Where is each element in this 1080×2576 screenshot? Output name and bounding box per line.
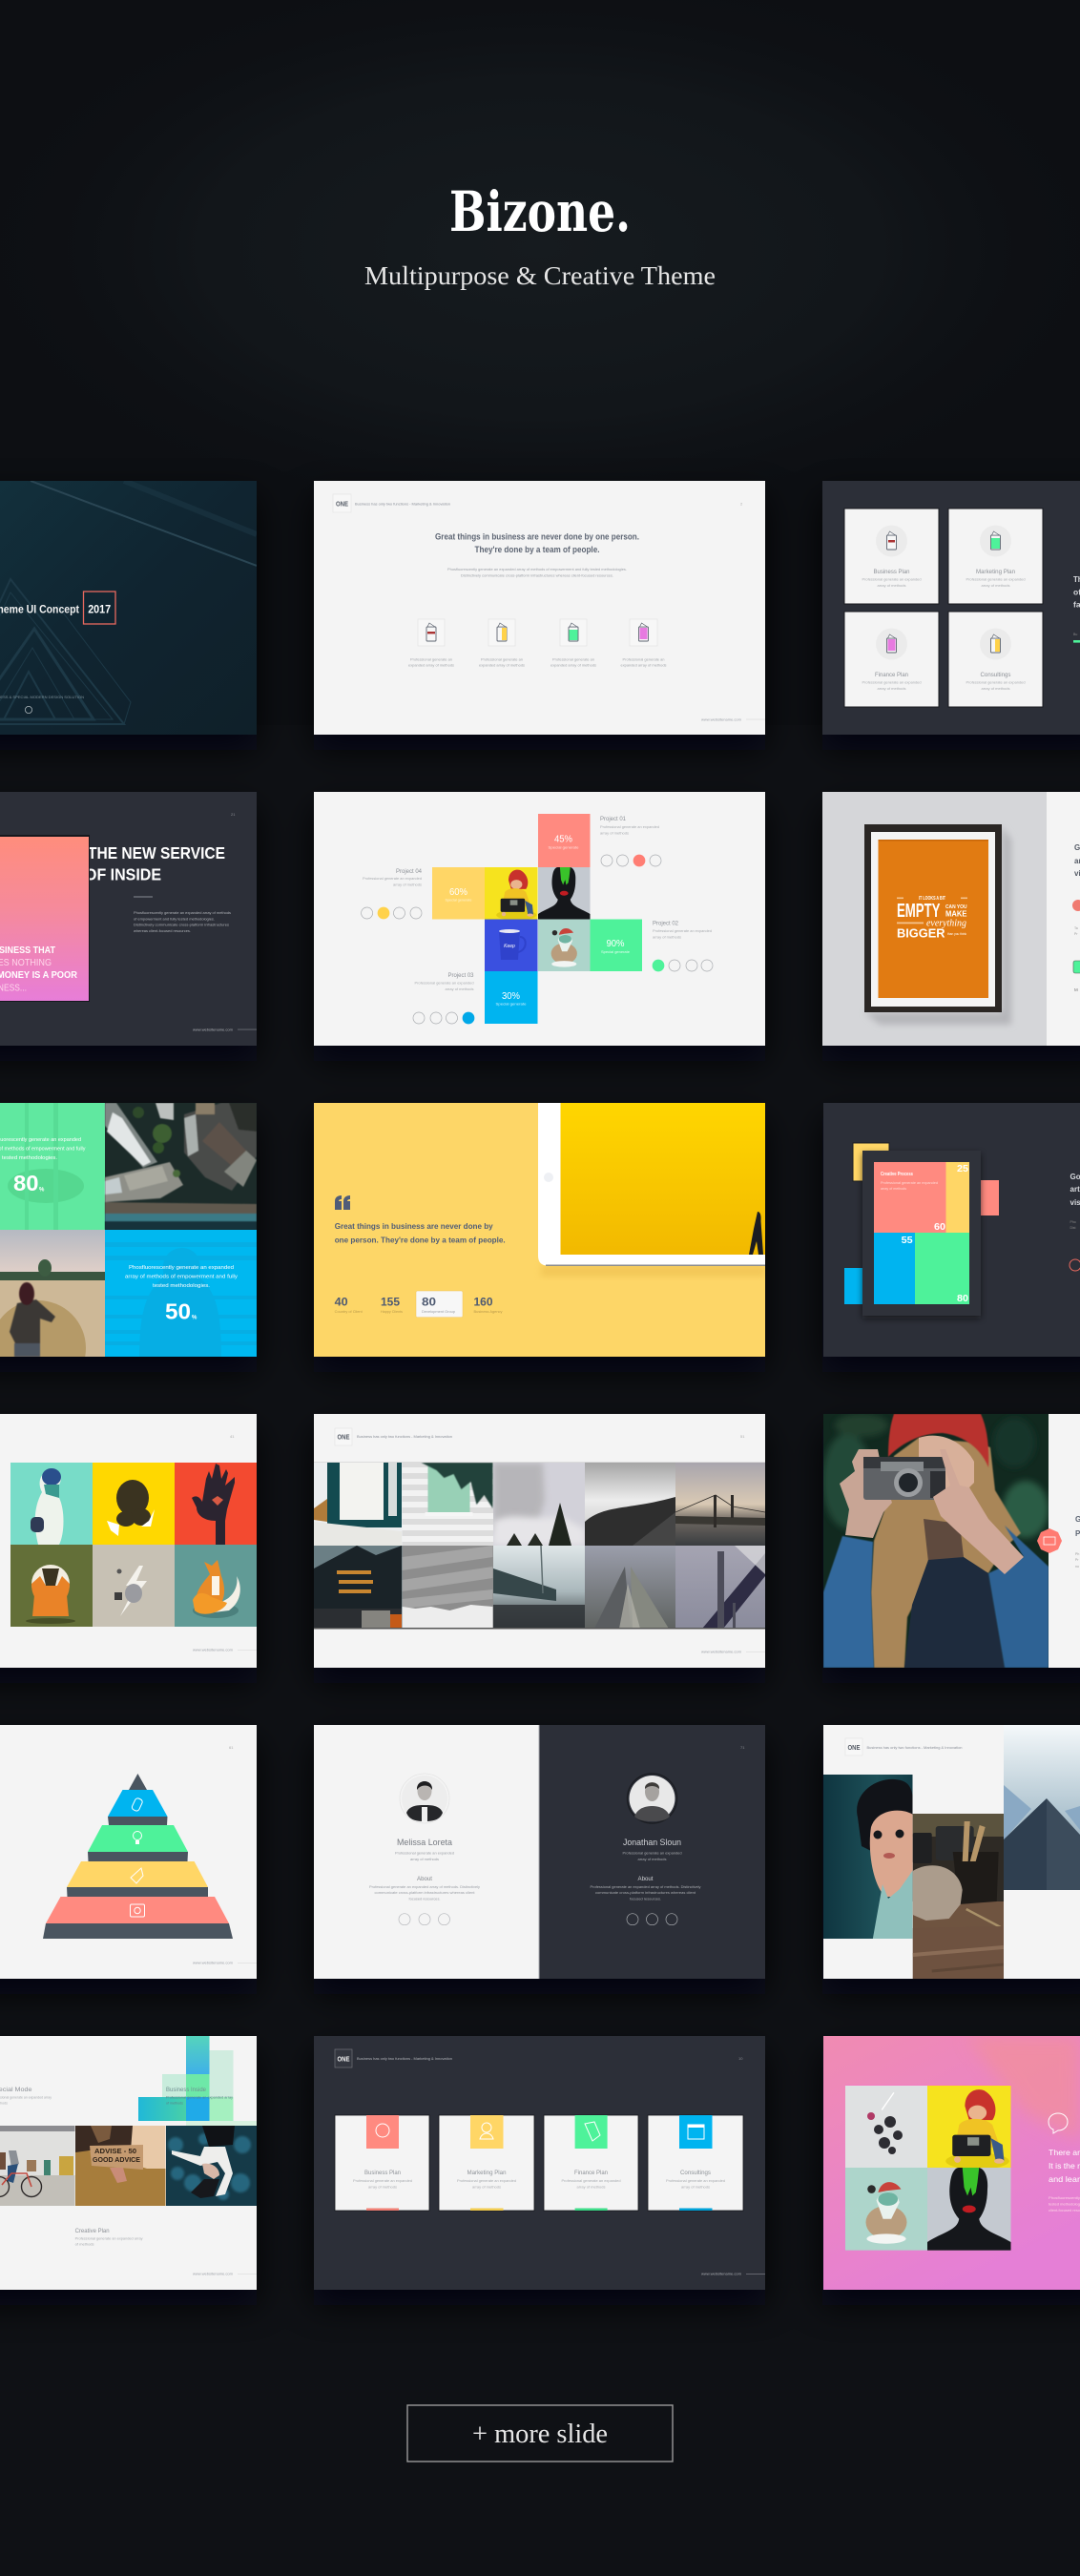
slide: four plans on dark	[314, 2036, 765, 2290]
project 04: Professional generate an expanded	[363, 877, 422, 881]
icon captions: expanded array of methods	[620, 664, 667, 668]
icon captions: expanded array of methods	[479, 664, 525, 668]
cards: array of methods	[981, 584, 1010, 588]
project 01: Project 01	[600, 817, 627, 822]
cards: Business Plan	[874, 570, 910, 575]
panel: cyan 50 percent: Phosfluorescently generate an expanded	[129, 1265, 234, 1271]
side text: It is the r	[1049, 2161, 1080, 2171]
icon captions: expanded array of methods	[550, 664, 596, 668]
card: business plan: Business Plan	[364, 2171, 401, 2176]
icon: down arrow	[25, 706, 32, 714]
cards: Marketing Plan	[976, 570, 1015, 575]
slide: pyramid	[0, 1725, 257, 1979]
illustration: red hand	[175, 1463, 257, 1545]
icon row	[418, 619, 657, 646]
poster art: CAN YOU	[945, 904, 967, 910]
heading: They're done by a team of people.	[475, 545, 599, 555]
paragraph: Phosfluorescently generate an expanded array of methods of empowerment and fully tested methodologies.	[447, 568, 627, 571]
footer	[701, 2273, 765, 2276]
quote mark	[335, 1195, 350, 1210]
slide: photo grid ten images	[314, 1414, 765, 1668]
side text: no	[1075, 1565, 1079, 1568]
slide: dark teal title concept	[0, 481, 257, 735]
heading	[85, 843, 225, 884]
year box: 2017	[88, 603, 111, 616]
icon: speech bubble	[1049, 2113, 1068, 2133]
icon captions: Professional generate an	[481, 658, 523, 662]
gradient blocks	[138, 2036, 257, 2126]
project 04	[362, 869, 423, 919]
side text: Pr	[1075, 1558, 1079, 1562]
caption: special mode	[0, 2088, 52, 2105]
poster art	[878, 840, 988, 998]
caption: creative plan: Creative Plan	[75, 2229, 110, 2234]
project 03: array of methods	[445, 987, 474, 991]
side text: Phosfluorescently	[1049, 2196, 1080, 2200]
side text: art	[1070, 1185, 1080, 1194]
right hand	[933, 1449, 1024, 1574]
caption: creative plan: of methods	[75, 2242, 94, 2246]
quote text	[335, 1221, 506, 1244]
photo: pyramid building	[1004, 1735, 1080, 1890]
profile: Jonathan Sloun: Professional generate an expanded array of methods. Distinctively	[590, 1885, 701, 1889]
slide: mode and gradient blocks	[0, 2036, 257, 2290]
project 04: array of methods	[393, 883, 422, 887]
more slide button	[407, 2405, 673, 2462]
photo grid	[314, 1462, 765, 1630]
quote text: one person. They're done by a team of people.	[335, 1235, 506, 1244]
project 01: Professional generate an expanded	[600, 825, 659, 829]
level: blue	[108, 1790, 168, 1817]
footer	[193, 2273, 257, 2276]
icon: coral hexagon badge	[1037, 1528, 1062, 1553]
cards: Professional generate an expanded	[966, 578, 1026, 582]
stats: Happy Clients	[381, 1310, 403, 1314]
level: green	[88, 1825, 188, 1852]
photo: aerial city	[105, 1103, 257, 1230]
side text: Pr	[1074, 932, 1078, 936]
dark card with blocks: 55	[902, 1236, 913, 1246]
panel: cyan 50 percent: %	[192, 1315, 197, 1320]
dark card with blocks: array of methods	[881, 1187, 906, 1191]
icon captions: expanded array of methods	[408, 664, 454, 668]
stats: Country of Client	[335, 1310, 363, 1314]
footer	[193, 1962, 257, 1965]
beanie	[888, 1414, 988, 1467]
project 01	[600, 817, 661, 866]
icon captions: Professional generate an	[552, 658, 594, 662]
header: ONE	[338, 2057, 350, 2063]
photo: santa illustration	[538, 920, 590, 971]
paragraph	[134, 911, 231, 933]
stats: 155	[381, 1296, 400, 1309]
panel: cyan 50 percent: array of methods of empowerment and fully	[125, 1275, 238, 1280]
icon captions: Professional generate an	[410, 658, 452, 662]
slide: mode and gradient blocks: 40	[228, 2056, 233, 2061]
panel: green 80 percent: %	[39, 1187, 45, 1193]
header: ONE	[338, 1435, 350, 1441]
card: consultings: Consultings	[680, 2171, 711, 2176]
photo: rustic table still life	[912, 1814, 1004, 1979]
cards: Finance Plan	[875, 673, 908, 678]
card: finance plan	[544, 2115, 638, 2211]
slide: pink with four image grid	[823, 2036, 1080, 2290]
card: business plan: Professional generate an expanded	[353, 2179, 412, 2183]
block: cyan 30 percent: Special generate	[496, 1002, 527, 1006]
card: finance plan: Finance Plan	[574, 2171, 608, 2176]
header: Business has only two functions - Marketing & Innovation	[357, 1434, 452, 1439]
illustration: orange character on olive	[10, 1545, 93, 1627]
header: Business has only two functions - Marketing & Innovation	[357, 2056, 452, 2061]
cards: Professional generate an expanded	[862, 578, 922, 582]
side text: Bu	[1073, 633, 1077, 636]
heading: THE NEW SERVICE	[88, 843, 225, 862]
side text: client-focused reso	[1049, 2209, 1080, 2212]
image grid	[845, 2086, 1011, 2251]
illustration: lightning on beige	[93, 1545, 175, 1627]
slide: six illustrations grid	[0, 1414, 257, 1668]
dark card with blocks: Professional generate an expanded	[881, 1181, 938, 1185]
photo strip	[0, 2126, 257, 2206]
profile: Jonathan Sloun: Jonathan Sloun	[623, 1838, 681, 1847]
cards: Consultings	[981, 673, 1011, 678]
footer: www.websitename.com	[193, 2273, 233, 2276]
header	[333, 494, 743, 512]
profile: Melissa Loreta: array of methods	[410, 1858, 439, 1861]
caption: business inside: of methods	[166, 2101, 183, 2105]
header	[335, 2049, 743, 2067]
header: ONE	[336, 502, 348, 508]
photo: woman in field	[0, 1230, 105, 1396]
hair	[871, 1438, 1021, 1668]
project 03: Professional generate an expanded	[414, 981, 474, 985]
footer: www.websitename.com	[701, 1651, 741, 1654]
side text	[1070, 1173, 1080, 1271]
block: coral 45 percent: 45%	[554, 835, 572, 845]
block: coral 45 percent	[538, 814, 590, 867]
project 01: array of methods	[600, 831, 629, 835]
panel: green 80 percent	[0, 1103, 105, 1230]
card: consultings: array of methods	[681, 2185, 710, 2189]
header	[335, 1428, 745, 1445]
panel: cyan 50 percent: 50	[165, 1299, 191, 1324]
block: blue mug: Keep	[504, 944, 515, 949]
face	[919, 1436, 974, 1490]
footer: www.websitename.com	[193, 1962, 233, 1965]
side text	[1049, 2148, 1080, 2212]
profile: Melissa Loreta: communicate cross-platform infrastructures whereas client	[374, 1891, 475, 1895]
stats: 80	[422, 1296, 436, 1309]
cards: array of methods	[878, 584, 906, 588]
dark card with blocks: 60	[934, 1222, 945, 1233]
profile: Melissa Loreta	[369, 1774, 480, 1925]
paragraph: Distinctively communicate cross-platform infrastructures	[134, 924, 229, 927]
profile: Melissa Loreta: focused resources.	[408, 1897, 441, 1901]
side text: M	[1074, 987, 1078, 992]
illustration: yellow bear	[93, 1463, 175, 1545]
side text: Pho	[1070, 1220, 1076, 1224]
more slide button: + more slide	[472, 2420, 608, 2449]
side text	[1075, 1515, 1080, 1568]
side text: There ar	[1049, 2148, 1080, 2157]
paragraph: Phosfluorescently generate an expanded array of methods	[134, 911, 231, 915]
shirt and neck	[924, 1519, 964, 1562]
card: marketing plan: array of methods	[472, 2185, 501, 2189]
card: business plan: array of methods	[368, 2185, 397, 2189]
gradient card	[0, 835, 90, 1002]
quote text: Great things in business are never done by	[335, 1221, 493, 1231]
card: marketing plan: Professional generate an expanded	[457, 2179, 516, 2183]
paragraph: Distinctively communicate cross-platform infrastructures whereas client-focused resources.	[461, 573, 613, 577]
profile: Jonathan Sloun: Professional generate an expanded	[622, 1851, 682, 1855]
footer: www.websitename.com	[701, 717, 741, 721]
profile: Jonathan Sloun: array of methods	[637, 1858, 667, 1861]
block: cyan 30 percent	[485, 971, 538, 1024]
paragraph: of empowerment and fully tested methodologies.	[134, 917, 215, 921]
level: coral	[46, 1897, 229, 1923]
side text: and lear	[1049, 2174, 1080, 2184]
block: yellow 60 percent	[432, 867, 485, 920]
header: 2	[740, 502, 743, 506]
card: finance plan: Professional generate an expanded	[561, 2179, 621, 2183]
card: marketing plan: Marketing Plan	[467, 2171, 506, 2176]
title: Bizone.	[449, 179, 631, 244]
footer: www.websitename.com	[193, 1028, 233, 1032]
profile: Jonathan Sloun: focused resources.	[630, 1897, 661, 1901]
slide: team profiles	[314, 1725, 765, 1979]
side text: Dist	[1070, 1226, 1076, 1230]
slide: great things in business with four icons	[314, 481, 765, 735]
poster art: EMPTY	[897, 901, 941, 922]
slide: portrait collage	[823, 1725, 1080, 1979]
slide: six illustrations grid: 41	[230, 1434, 235, 1439]
stats	[335, 1291, 503, 1318]
slide: quote with tablet on yellow	[314, 1103, 765, 1357]
project 03: Project 03	[448, 973, 474, 979]
subtitle: Multipurpose & Creative Theme	[364, 261, 716, 290]
heading: Great things in business are never done by one person.	[435, 532, 639, 542]
footer	[701, 1651, 765, 1654]
block: blue mug	[485, 920, 538, 971]
panel: green 80 percent: tested methodologies.	[2, 1155, 57, 1161]
header: Business has only two functions - Marketing & Innovation	[355, 502, 450, 506]
paragraph: whereas client-focused resources.	[134, 929, 191, 933]
paragraph	[447, 568, 627, 577]
header: Business has only two functions - Marketing & Innovation	[866, 1745, 962, 1750]
illustration: fox on teal	[175, 1545, 257, 1627]
stats: Development Group	[422, 1310, 455, 1314]
photo: black head	[538, 867, 590, 920]
poster frame	[864, 824, 1002, 1012]
slide: photo and percent collage	[0, 1103, 257, 1357]
profile: Melissa Loreta: About	[417, 1877, 432, 1882]
side text	[1072, 843, 1080, 992]
side text: Ph	[1075, 1552, 1079, 1556]
block: green 90 percent: 90%	[607, 939, 625, 949]
footer	[701, 717, 765, 721]
poster art: BIGGER	[897, 926, 945, 941]
card: consultings: Professional generate an expanded	[666, 2179, 725, 2183]
illustration: teal traveller	[10, 1463, 93, 1545]
project 04: Project 04	[396, 869, 423, 875]
footer: www.websitename.com	[193, 1649, 233, 1652]
photo strip: ADVISE - 50	[94, 2149, 136, 2155]
caption: creative plan: Professional generate an expanded array	[75, 2236, 143, 2240]
slide: team profiles: 71	[740, 1745, 745, 1750]
profile: Melissa Loreta: Professional generate an expanded	[395, 1851, 454, 1855]
side text: Ta	[1074, 926, 1078, 930]
side text	[1073, 574, 1080, 643]
panel: cyan 50 percent	[105, 1230, 257, 1357]
photo: child portrait	[823, 1775, 912, 1939]
card: finance plan: array of methods	[576, 2185, 606, 2189]
slide: woman with camera photo	[823, 1414, 1080, 1668]
profile: Melissa Loreta: Professional generate an expanded array of methods. Distinctively	[369, 1885, 480, 1889]
card: business plan	[335, 2115, 429, 2211]
profile: Jonathan Sloun: communicate cross-platform infrastructures whereas client	[595, 1891, 696, 1895]
icon captions	[408, 658, 667, 668]
stats: 160	[473, 1296, 493, 1309]
poster art: than you think	[947, 932, 966, 936]
heading: OF INSIDE	[85, 865, 161, 884]
slide: pyramid: 61	[229, 1745, 234, 1750]
poster art: IT LOOKS A BIT	[919, 896, 945, 902]
denim jacket	[823, 1536, 874, 1668]
left hand	[840, 1449, 892, 1538]
cards: array of methods	[981, 687, 1010, 691]
footer: 21	[231, 812, 236, 817]
heading	[435, 532, 639, 555]
cards	[844, 509, 1043, 707]
pyramid chart	[43, 1774, 233, 1939]
block: green 90 percent	[590, 920, 642, 971]
block: cyan 30 percent: 30%	[502, 991, 520, 1002]
panel: green 80 percent: 80	[13, 1171, 38, 1195]
caption: business inside	[166, 2088, 233, 2105]
footer	[193, 812, 257, 1032]
header	[845, 1738, 962, 1755]
poster art: everything	[926, 918, 966, 929]
card: marketing plan	[439, 2115, 534, 2211]
footer: www.websitename.com	[701, 2273, 741, 2276]
dark card with blocks: 25	[957, 1164, 968, 1174]
block: green 90 percent: Special generate	[601, 950, 630, 954]
header: 51	[740, 1434, 745, 1439]
poster art: MAKE	[945, 908, 967, 918]
block: yellow 60 percent: 60%	[449, 887, 467, 898]
profile: Jonathan Sloun: About	[637, 1877, 654, 1882]
project 02: Professional generate an expanded	[653, 929, 712, 933]
slide: four plan cards dark	[822, 481, 1080, 735]
cards: Professional generate an expanded	[966, 681, 1026, 685]
photo strip: GOOD ADVICE	[93, 2157, 140, 2164]
panel: cyan 50 percent: tested methodologies.	[153, 1283, 210, 1289]
profile: Jonathan Sloun	[590, 1774, 701, 1925]
dark card with blocks	[862, 1151, 981, 1319]
project 02: Project 02	[653, 922, 679, 927]
project 03	[413, 973, 474, 1024]
project 02	[653, 922, 713, 971]
photo: woman with camera	[823, 1414, 1049, 1668]
year box	[84, 592, 115, 624]
card: consultings	[648, 2115, 743, 2211]
cards: Professional generate an expanded	[862, 681, 922, 685]
photo: child with radio	[485, 867, 538, 920]
camera	[863, 1457, 945, 1500]
caption: business inside: Professional generate an expanded array	[166, 2095, 233, 2099]
caption: creative plan	[75, 2229, 143, 2246]
dark card with blocks: 80	[957, 1294, 968, 1304]
cards: array of methods	[878, 687, 906, 691]
side text: tested methodolog	[1049, 2202, 1080, 2206]
footer	[193, 1649, 257, 1652]
icon captions: Professional generate an	[622, 658, 665, 662]
stats: 40	[335, 1296, 348, 1309]
project 02: array of methods	[653, 935, 681, 939]
slide: new service with gradient card	[0, 792, 257, 1046]
header: ONE	[847, 1745, 861, 1752]
tablet	[538, 1103, 765, 1266]
level: yellow	[67, 1861, 208, 1887]
block: yellow 60 percent: Special generate	[445, 899, 471, 903]
stats: Business Agency	[473, 1310, 503, 1314]
dark card with blocks: Creative Process	[881, 1172, 913, 1177]
header: 10	[738, 2056, 743, 2061]
block: coral 45 percent: Special generate	[548, 845, 578, 849]
slide: framed poster	[822, 792, 1080, 1046]
profile: Melissa Loreta: Melissa Loreta	[397, 1838, 452, 1847]
caption: business inside: Business Inside	[166, 2088, 207, 2093]
slide: creative process blocks	[823, 1103, 1080, 1357]
slide: project cross grid	[314, 792, 765, 1046]
